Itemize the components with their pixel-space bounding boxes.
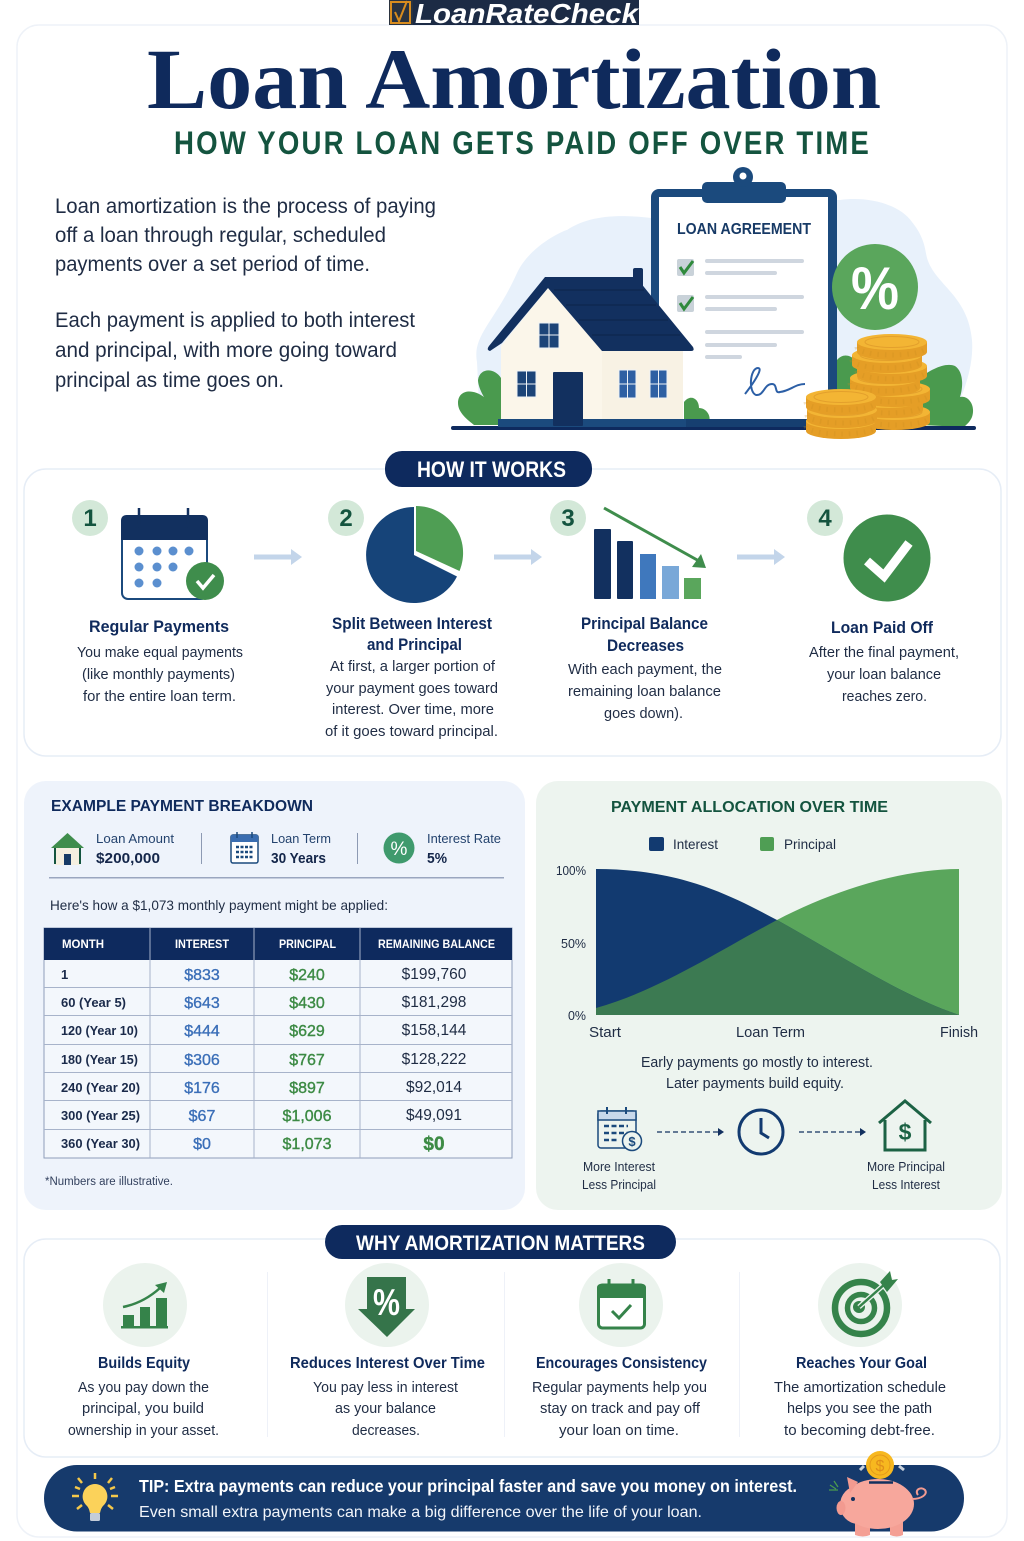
- row: month 120: $629: [289, 1023, 325, 1040]
- intro text: off a loan through regular, scheduled: [55, 224, 386, 247]
- heading: PAYMENT ALLOCATION OVER TIME: [611, 799, 888, 816]
- panel: how it works: [24, 451, 1001, 756]
- step 3: remaining loan balance: [568, 683, 721, 700]
- icon: percent badge: [832, 244, 918, 330]
- row: month 60: [61, 994, 466, 1012]
- heading: why amortization matters: [325, 1225, 676, 1259]
- row: month 60: $643: [184, 995, 220, 1012]
- chart caption: Later payments build equity.: [666, 1076, 844, 1092]
- table header: [62, 939, 495, 951]
- icon: light bulb: [72, 1473, 118, 1521]
- intro text: payments over a set period of time.: [55, 253, 370, 276]
- row: month 300: 300 (Year 25): [61, 1108, 140, 1123]
- area chart: Loan Term: [736, 1024, 805, 1041]
- step 4: 4: [818, 505, 832, 532]
- arrow: [657, 1128, 724, 1136]
- icon: check circle: [844, 514, 930, 602]
- item: reduces interest: You pay less in interest: [313, 1380, 458, 1396]
- icon: interest rate: %: [391, 839, 408, 860]
- item: builds equity: As you pay down the: [78, 1380, 209, 1396]
- step 1: [72, 500, 243, 705]
- early label: More Interest: [583, 1160, 656, 1174]
- step 1: You make equal payments: [77, 644, 243, 661]
- step 2: Split Between Interest: [332, 614, 492, 633]
- row: month 240: $176: [184, 1080, 220, 1097]
- icon: target: [818, 1263, 902, 1347]
- plants: [458, 355, 973, 427]
- legend: [649, 836, 836, 852]
- icon: house: [488, 268, 694, 426]
- item: encourages consistency: Regular payments help you: [532, 1380, 707, 1396]
- icon: growth chart: [103, 1263, 187, 1347]
- loan amount: $200,000: [96, 850, 160, 867]
- row: month 1: $833: [184, 967, 220, 984]
- item: reaches your goal: [774, 1263, 946, 1439]
- heading: why amortization matters: WHY AMORTIZATION MATTERS: [356, 1232, 645, 1255]
- tip text: [139, 1476, 797, 1521]
- table header: PRINCIPAL: [279, 939, 336, 951]
- arrow: [737, 549, 785, 565]
- step 4: reaches zero.: [842, 688, 927, 705]
- table intro: Here's how a $1,073 monthly payment might be applied:: [50, 897, 388, 913]
- panel: example payment breakdown: [24, 781, 525, 1210]
- icon: clipboard: [651, 167, 837, 425]
- late label: [867, 1160, 945, 1192]
- item: encourages consistency: [532, 1263, 707, 1439]
- early label: [582, 1160, 656, 1192]
- step 1: for the entire loan term.: [83, 688, 236, 705]
- row: month 240: [61, 1079, 462, 1097]
- row: month 120: $444: [184, 1023, 220, 1040]
- row: month 240: $897: [289, 1080, 325, 1097]
- row: month 300: [61, 1107, 462, 1125]
- intro text: [55, 195, 436, 392]
- step 1: (like monthly payments): [82, 666, 235, 683]
- icon: percent badge: %: [851, 255, 899, 322]
- row: month 360: $0: [193, 1136, 211, 1153]
- interest rate: Interest Rate: [427, 831, 501, 846]
- item: reduces interest: decreases.: [352, 1423, 420, 1439]
- row: month 300: $67: [189, 1108, 215, 1125]
- item: builds equity: ownership in your asset.: [68, 1423, 219, 1439]
- legend: Interest: [673, 836, 718, 852]
- table: [44, 928, 512, 1158]
- footnote: *Numbers are illustrative.: [45, 1176, 173, 1188]
- step 3: With each payment, the: [568, 661, 722, 678]
- step 4: your loan balance: [827, 666, 941, 683]
- icon: coin stacks: [806, 334, 930, 439]
- area chart: Finish: [940, 1024, 978, 1041]
- row: month 1: $199,760: [402, 966, 467, 983]
- icon: house with dollar: $: [899, 1119, 912, 1145]
- icon: calendar check: [579, 1263, 663, 1347]
- intro text: Loan amortization is the process of paying: [55, 195, 436, 218]
- intro text: principal as time goes on.: [55, 369, 284, 392]
- intro text: Each payment is applied to both interest: [55, 309, 415, 332]
- icon: loan term calendar: [231, 832, 258, 863]
- interest rate: 5%: [427, 850, 447, 867]
- step 3: [550, 500, 722, 722]
- step 2: interest. Over time, more: [332, 701, 494, 718]
- icon: calendar with dollar: [598, 1107, 642, 1150]
- item: reduces interest: [290, 1263, 485, 1439]
- early label: Less Principal: [582, 1178, 656, 1192]
- interest rate: [427, 831, 501, 867]
- item: reaches your goal: helps you see the path: [787, 1401, 932, 1417]
- callout: tip: [44, 1451, 964, 1536]
- loan term: [271, 831, 331, 867]
- table header: MONTH: [62, 939, 104, 951]
- row: month 1: 1: [61, 967, 68, 982]
- icon: clipboard: LOAN AGREEMENT: [677, 221, 811, 238]
- row: month 120: $158,144: [402, 1022, 467, 1039]
- step 3: goes down).: [604, 705, 683, 722]
- row: month 180: $128,222: [402, 1051, 466, 1068]
- background blob: [476, 199, 972, 425]
- row: month 360: [61, 1134, 445, 1155]
- row: month 120: 120 (Year 10): [61, 1023, 138, 1038]
- row: month 180: 180 (Year 15): [61, 1052, 138, 1067]
- row: month 180: $306: [184, 1052, 220, 1069]
- step 4: After the final payment,: [809, 644, 959, 661]
- item: reaches your goal: to becoming debt-free.: [784, 1423, 935, 1439]
- panel: payment allocation over time: [536, 781, 1002, 1210]
- step 3: 3: [561, 505, 575, 532]
- loan term: Loan Term: [271, 831, 331, 846]
- row: month 60: $430: [289, 995, 325, 1012]
- row: month 240: 240 (Year 20): [61, 1080, 140, 1095]
- area chart: Start: [589, 1024, 622, 1041]
- item: encourages consistency: Encourages Consistency: [536, 1355, 707, 1372]
- arrow: [494, 549, 542, 565]
- row: month 360: $1,073: [283, 1136, 332, 1153]
- icon: calendar: [121, 508, 224, 600]
- row: month 300: $49,091: [406, 1107, 462, 1124]
- late label: Less Interest: [872, 1178, 940, 1192]
- row: month 60: $181,298: [402, 994, 466, 1011]
- item: builds equity: principal, you build: [82, 1401, 204, 1417]
- row: month 180: [61, 1051, 466, 1069]
- tip text: Even small extra payments can make a big difference over the life of your loan.: [139, 1504, 702, 1521]
- icon: piggy bank: [829, 1451, 926, 1536]
- loan term: 30 Years: [271, 850, 326, 867]
- chart caption: [641, 1055, 873, 1092]
- item: builds equity: Builds Equity: [98, 1355, 190, 1372]
- step 3: Decreases: [607, 636, 684, 655]
- area chart: 0%: [568, 1008, 586, 1023]
- icon: loan amount house: [51, 833, 84, 865]
- item: builds equity: [68, 1263, 219, 1439]
- area chart: 100%: [556, 863, 586, 878]
- ground: [451, 419, 976, 430]
- legend: Principal: [784, 836, 836, 852]
- arrow: [799, 1128, 866, 1136]
- row: month 360: 360 (Year 30): [61, 1136, 140, 1151]
- table header: REMAINING BALANCE: [378, 939, 495, 951]
- illustration: house and loan agreement: [451, 167, 976, 439]
- icon: percent down arrow: %: [373, 1282, 400, 1323]
- row: month 240: $92,014: [406, 1079, 462, 1096]
- arrow: [254, 549, 302, 565]
- heading: how it works: [385, 451, 592, 487]
- row: month 360: $0: [423, 1134, 445, 1155]
- item: reaches your goal: Reaches Your Goal: [796, 1355, 927, 1372]
- late label: More Principal: [867, 1160, 945, 1174]
- icon: piggy bank: $: [876, 1458, 885, 1475]
- icon: pie chart: [366, 506, 463, 603]
- loan amount: Loan Amount: [96, 831, 174, 846]
- heading: how it works: HOW IT WORKS: [417, 457, 566, 482]
- row: month 60: 60 (Year 5): [61, 995, 126, 1010]
- row: month 1: [61, 966, 467, 984]
- area chart: [556, 863, 978, 1041]
- item: reduces interest: as your balance: [335, 1401, 436, 1417]
- icon: calendar with dollar: $: [628, 1134, 636, 1149]
- step 3: Principal Balance: [581, 614, 708, 633]
- step 2: At first, a larger portion of: [330, 658, 496, 675]
- step 2: your payment goes toward: [326, 680, 498, 697]
- chart caption: Early payments go mostly to interest.: [641, 1055, 873, 1071]
- item: reaches your goal: The amortization schedule: [774, 1380, 946, 1396]
- loan amount: [96, 831, 174, 867]
- step 1: Regular Payments: [89, 617, 229, 636]
- icon: declining bars: [594, 508, 706, 599]
- row: month 1: $240: [289, 967, 325, 984]
- row: month 180: $767: [289, 1052, 325, 1069]
- icon: clock: [739, 1110, 783, 1154]
- panel: why amortization matters: [24, 1225, 1000, 1457]
- step 4: [807, 500, 959, 705]
- item: reduces interest: Reduces Interest Over Time: [290, 1355, 485, 1372]
- step 1: 1: [83, 505, 97, 532]
- step 2: of it goes toward principal.: [325, 723, 498, 740]
- icon: percent down arrow: [345, 1263, 429, 1347]
- heading: EXAMPLE PAYMENT BREAKDOWN: [51, 798, 313, 815]
- item: encourages consistency: your loan on time.: [559, 1423, 679, 1439]
- row: month 120: [61, 1022, 467, 1040]
- intro text: and principal, with more going toward: [55, 339, 397, 362]
- icon: house with dollar: [879, 1101, 931, 1150]
- area chart: 50%: [561, 936, 586, 951]
- item: encourages consistency: stay on track and pay off: [540, 1401, 701, 1417]
- tip text: TIP: Extra payments can reduce your principal faster and save you money on interest.: [139, 1476, 797, 1496]
- step 4: Loan Paid Off: [831, 618, 933, 637]
- table header: INTEREST: [175, 939, 229, 951]
- icon: interest rate: [384, 832, 414, 864]
- subtitle: HOW YOUR LOAN GETS PAID OFF OVER TIME: [174, 125, 871, 161]
- step 2: [325, 500, 498, 740]
- step 2: and Principal: [367, 635, 462, 654]
- title: Loan Amortization: [147, 31, 881, 127]
- row: month 300: $1,006: [283, 1108, 332, 1125]
- step 2: 2: [339, 505, 353, 532]
